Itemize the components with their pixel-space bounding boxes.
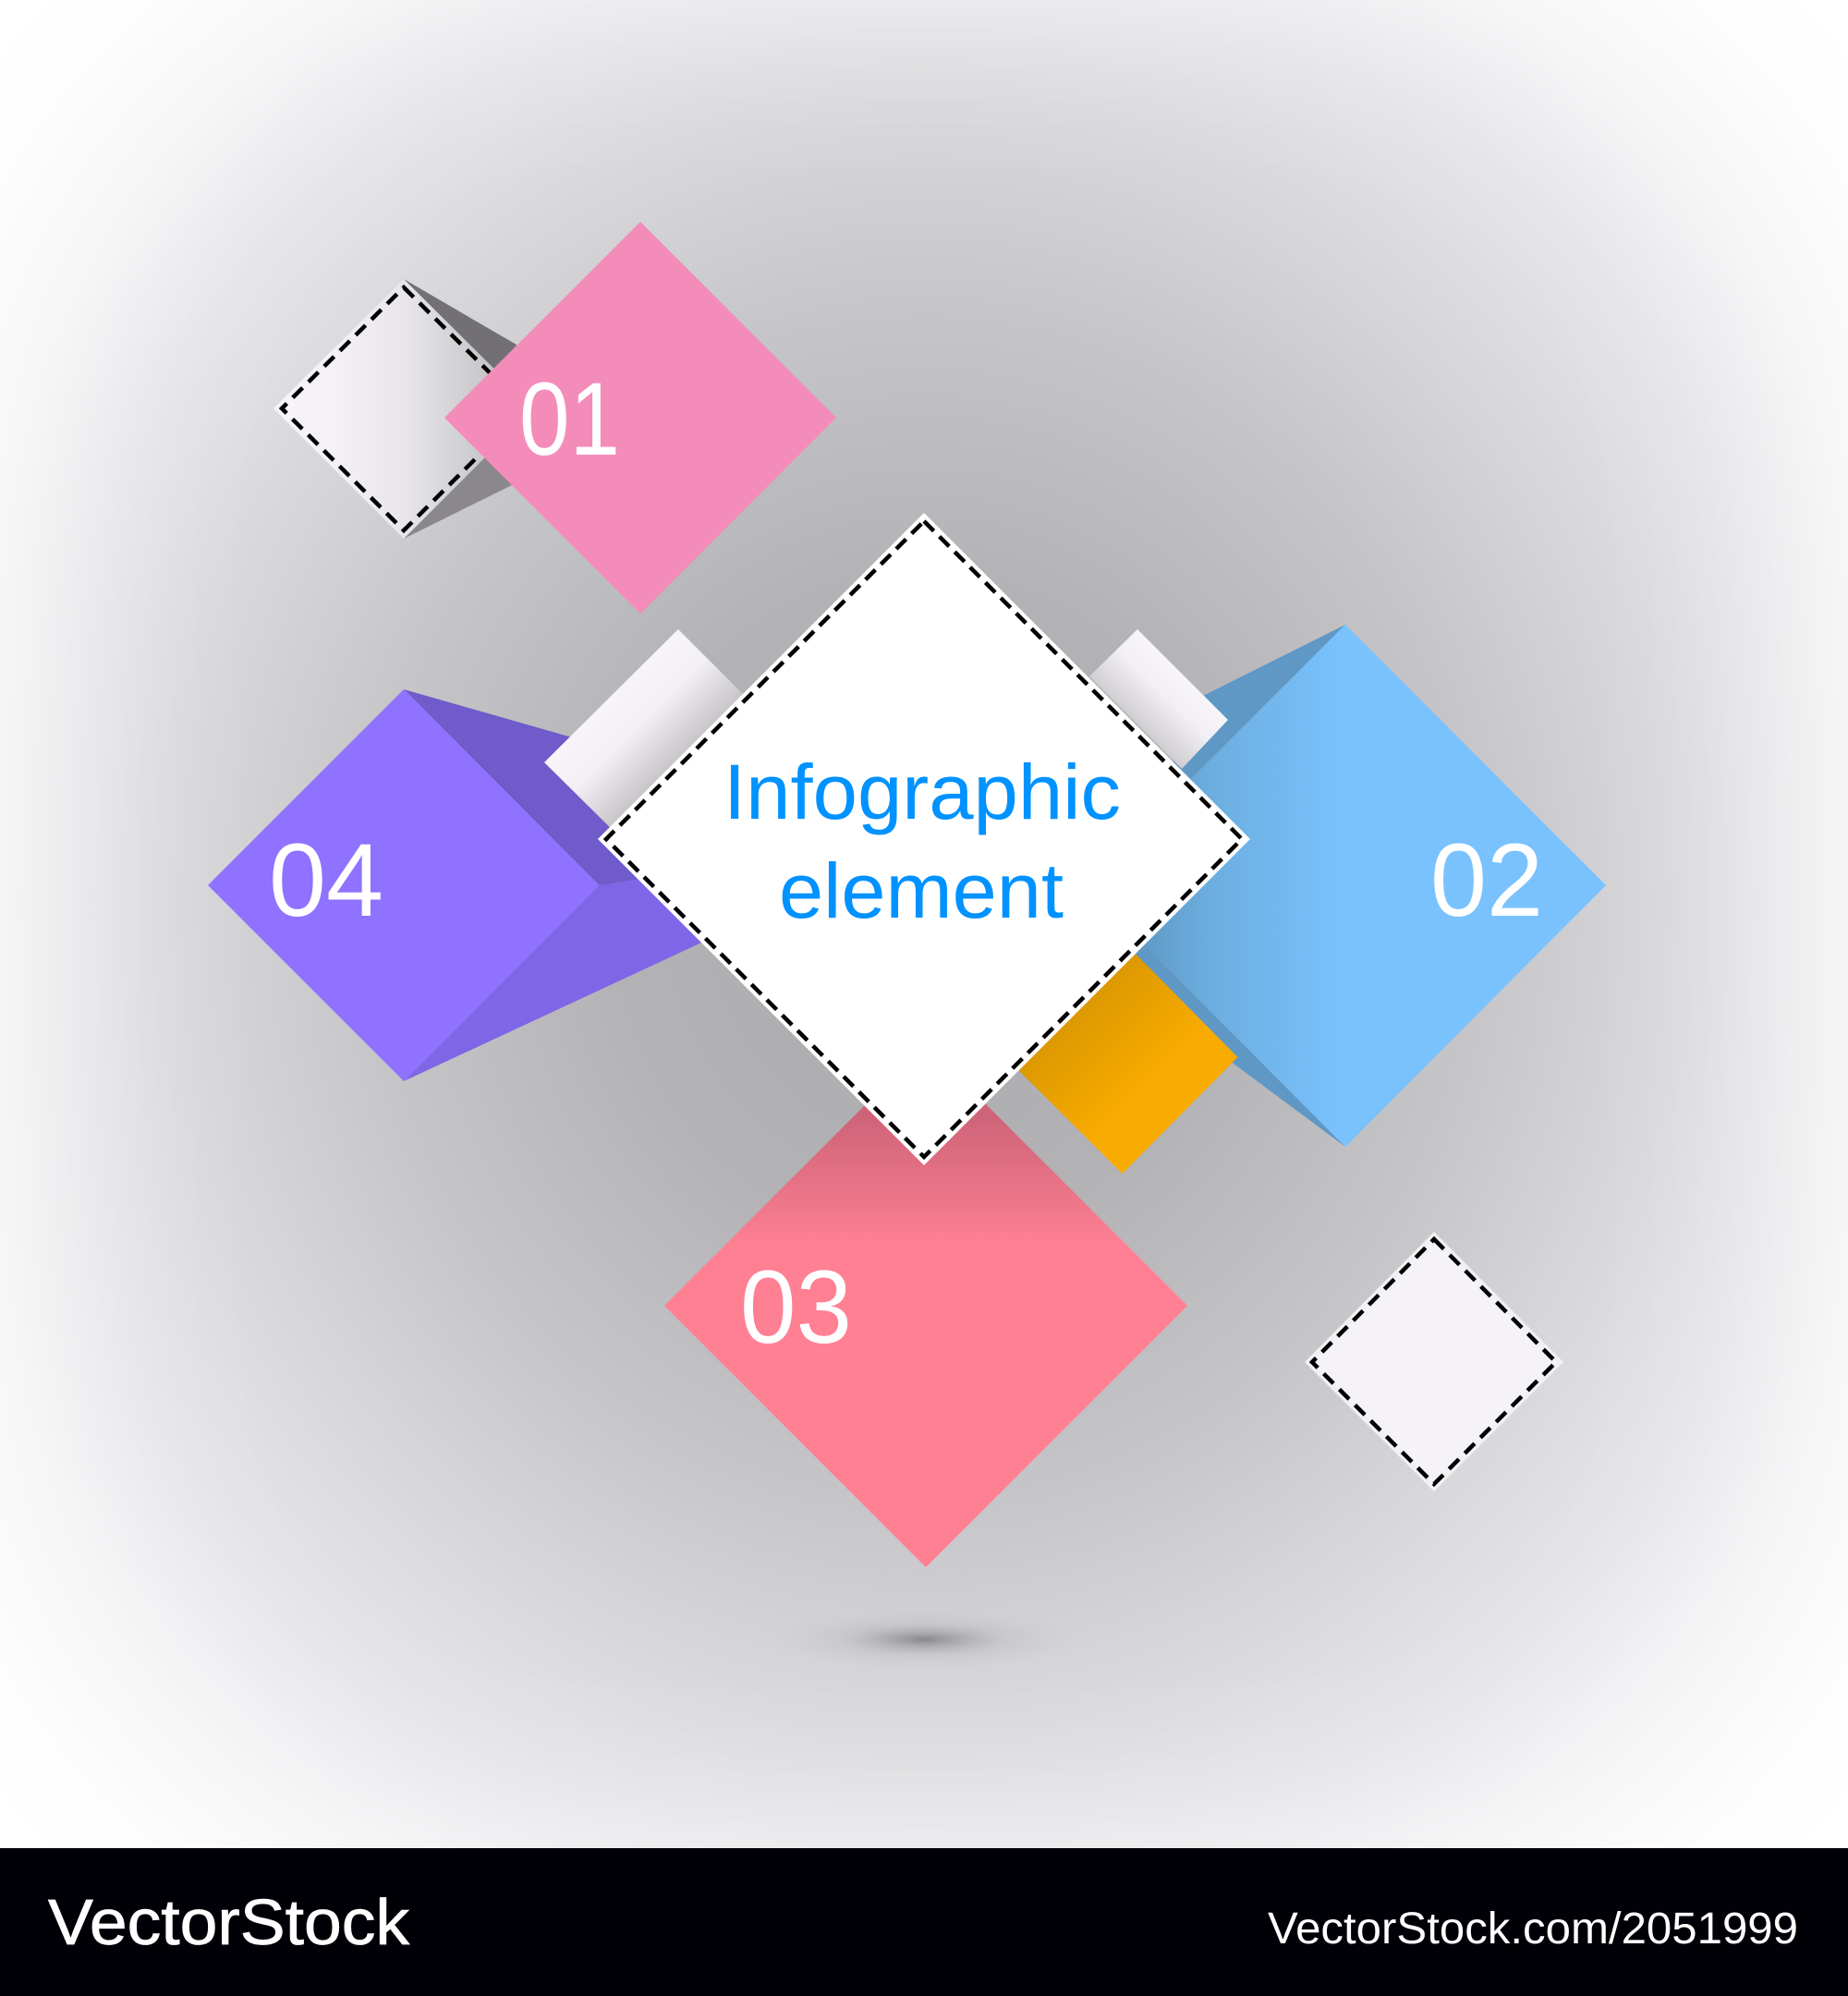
panel 03: coral diamond (664, 1044, 1187, 1567)
floating drop shadow (762, 1608, 1086, 1671)
orange tab (991, 927, 1238, 1174)
paper tab left (544, 629, 767, 855)
number 02: 02 (1430, 822, 1543, 938)
footer bar (0, 1848, 1848, 1996)
small dashed diamond top left with shadow (274, 279, 534, 539)
title line 2: element (779, 847, 1064, 934)
footer brand: VectorStock (48, 1886, 410, 1958)
title line 1: Infographic (723, 748, 1121, 835)
center white diamond with heading (598, 513, 1250, 1165)
footer url: VectorStock.com/2051999 (1268, 1905, 1798, 1953)
number 03: 03 (740, 1249, 852, 1365)
paper tab right (1089, 629, 1228, 769)
panel 01: pink diamond (444, 222, 836, 614)
small dashed diamond bottom right (1305, 1232, 1563, 1491)
panel 04: purple cube (208, 689, 711, 1081)
number 01: 01 (519, 361, 620, 477)
number 04: 04 (269, 822, 383, 938)
panel 02: blue cube (1085, 625, 1606, 1147)
